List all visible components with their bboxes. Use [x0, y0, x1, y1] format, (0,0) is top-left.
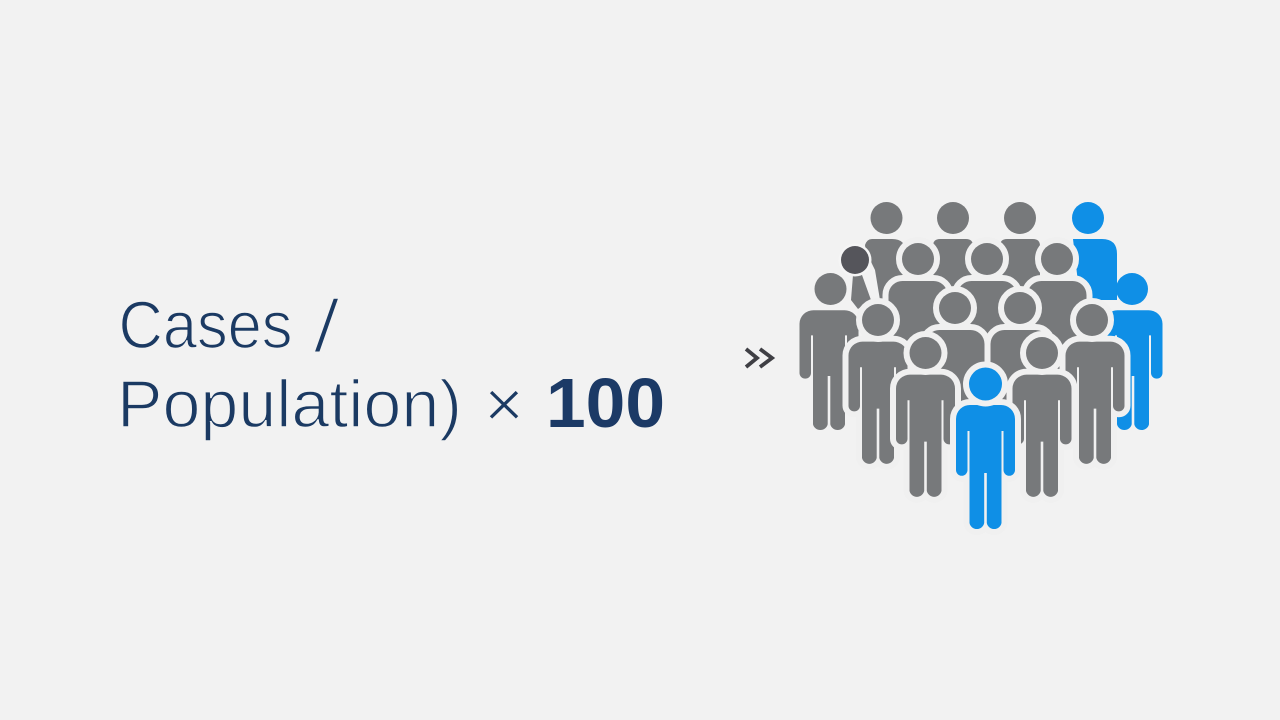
formula text: Population): [117, 367, 462, 442]
third row people: [924, 286, 1053, 401]
icon: double chevron arrow: [746, 349, 772, 367]
left person: [800, 273, 858, 430]
fourth row people: [848, 304, 1124, 464]
formula text: 100: [546, 364, 665, 442]
fifth row people: [896, 337, 1072, 497]
right blue person: [1104, 273, 1162, 430]
formula text: /: [313, 284, 340, 368]
formula text: Cases: [118, 288, 292, 363]
second row people: [888, 243, 1086, 384]
formula text: [117, 284, 665, 442]
front blue person: [956, 368, 1015, 529]
back row people: [865, 202, 1117, 300]
formula text: ×: [484, 367, 524, 442]
icon: crowd of people: [800, 202, 1162, 529]
dark highlighted head: [841, 246, 871, 309]
